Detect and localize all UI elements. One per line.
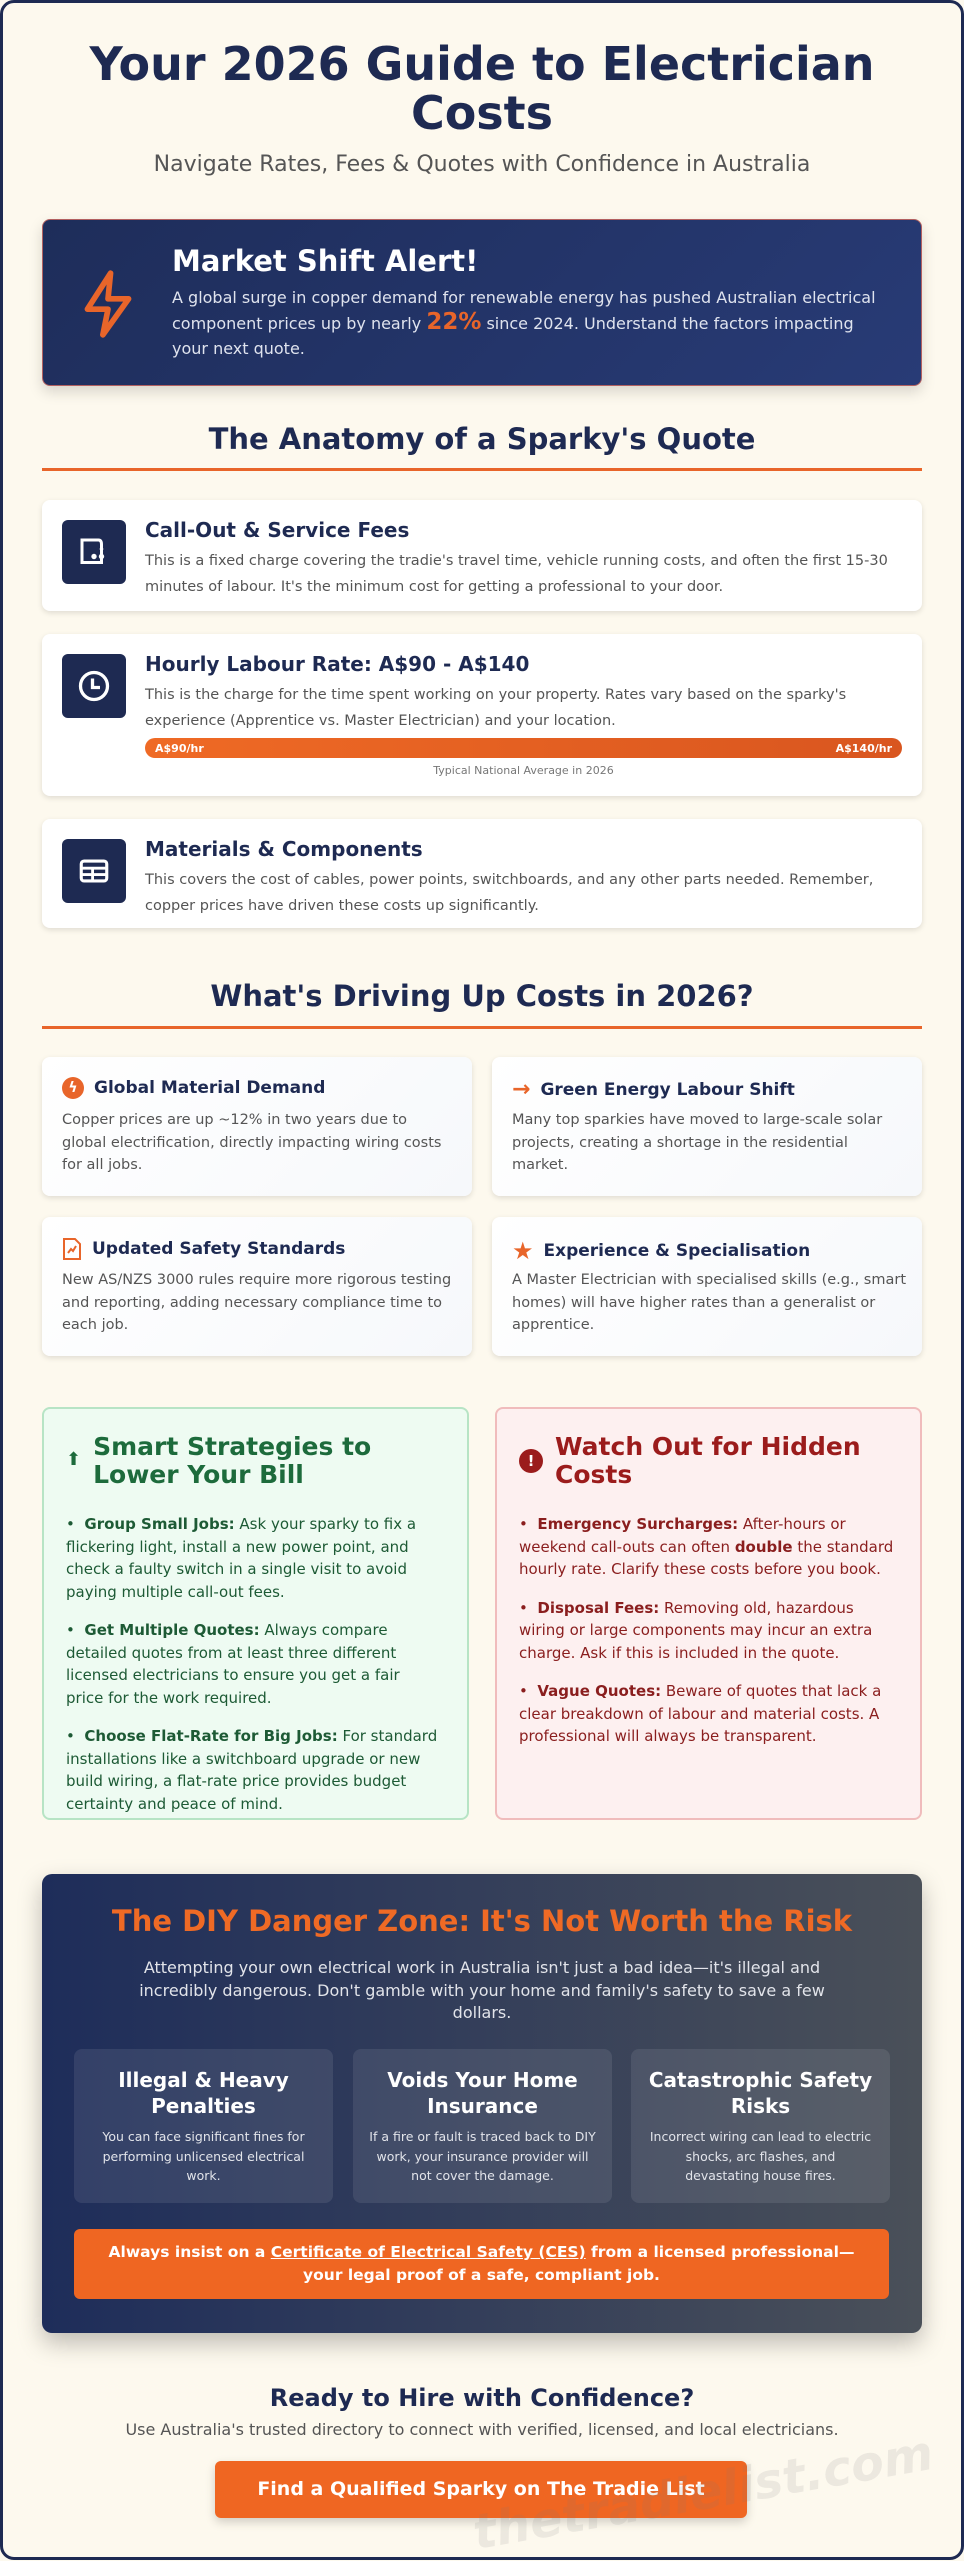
- panel: global material demand: Global Material Demand: [94, 1078, 325, 1098]
- title: Your 2026 Guide to Electrician Costs: [89, 37, 875, 140]
- alert panel: [42, 219, 922, 386]
- CTA button: [215, 2461, 747, 2518]
- callout: CES: Always insist on a Certificate of Electrical Safety (CES) from a licensed professional—your legal proof of a safe, compliant job.: [109, 2243, 854, 2284]
- panel: smart strategies: Smart Strategies to Lower Your Bill: [93, 1432, 371, 1489]
- panel: experience: [492, 1217, 922, 1356]
- sub-card: illegal: [74, 2049, 333, 2203]
- card: call-out fees: This is a fixed charge covering the tradie's travel time, vehicle running costs, and often the first 15-30 minutes of labour. It's the minimum cost for getting a professional to your door.: [145, 553, 888, 595]
- card: hourly labour: Hourly Labour Rate: A$90 - A$140: [145, 652, 529, 676]
- panel: green energy shift: Many top sparkies have moved to large-scale solar projects, creating a shortage in the residential market.: [512, 1112, 882, 1173]
- panel: hidden costs: Watch Out for Hidden Costs: [555, 1432, 861, 1489]
- callout: CES: [74, 2229, 889, 2299]
- panel: hidden costs: • Vague Quotes: Beware of quotes that lack a clear breakdown of labour and material costs. A professional will always be transparent.: [519, 1682, 881, 1745]
- card: call-out fees: Call-Out & Service Fees: [145, 518, 409, 542]
- panel: smart strategies: • Group Small Jobs: Ask your sparky to fix a flickering light, install a new power point, and check a faulty switch in a single visit to avoid paying multiple call-out fees.: [66, 1515, 416, 1600]
- panel: DIY danger zone: [42, 1874, 922, 2333]
- DIY text: Attempting your own electrical work in Australia isn't just a bad idea—it's illegal and incredibly dangerous. Don't gamble with your home and family's safety to save a few dollars.: [139, 1958, 825, 2022]
- panel: global material demand: [42, 1057, 472, 1196]
- panel: smart strategies: ⬆: [66, 1449, 81, 1470]
- panel: experience: ★: [512, 1237, 534, 1265]
- alert heading: Market Shift Alert!: [172, 244, 478, 278]
- card: materials: [42, 819, 922, 928]
- watermark: thetradielist.com: [469, 2425, 937, 2561]
- card: hourly labour: [42, 634, 922, 796]
- icon: table: [62, 839, 126, 903]
- panel: green energy shift: →: [512, 1077, 530, 1102]
- panel: green energy shift: [492, 1057, 922, 1196]
- icon: wallet: [62, 520, 126, 584]
- footer text: Use Australia's trusted directory to connect with verified, licensed, and local electricians.: [125, 2420, 839, 2439]
- panel: experience: A Master Electrician with specialised skills (e.g., smart homes) will have higher rates than a generalist or apprentice.: [512, 1272, 906, 1333]
- panel: hidden costs: !: [528, 1452, 534, 1470]
- DIY heading: The DIY Danger Zone: It's Not Worth the Risk: [112, 1904, 852, 1938]
- CTA button: Find a Qualified Sparky on The Tradie List: [257, 2478, 705, 2500]
- card: call-out fees: [42, 500, 922, 611]
- icon: clock: [62, 654, 126, 718]
- sub-card: insurance: If a fire or fault is traced back to DIY work, your insurance provider will not cover the damage.: [369, 2129, 596, 2183]
- section heading: anatomy: The Anatomy of a Sparky's Quote: [209, 422, 755, 456]
- panel: global material demand: Copper prices are up ~12% in two years due to global electrification, directly impacting wiring costs for all jobs.: [62, 1112, 441, 1173]
- sub-card: safety: Incorrect wiring can lead to electric shocks, arc flashes, and devastating house fires.: [650, 2129, 871, 2183]
- sub-card: insurance: [353, 2049, 612, 2203]
- panel: smart strategies: • Get Multiple Quotes: Always compare detailed quotes from at least three different licensed electricians to ensure you get a fair price for the work required.: [66, 1621, 400, 1706]
- rate bar: [145, 738, 902, 758]
- panel: safety standards: Updated Safety Standards: [92, 1239, 345, 1259]
- sub-card: safety: Catastrophic Safety Risks: [649, 2068, 872, 2118]
- footer heading: Ready to Hire with Confidence?: [270, 2384, 694, 2412]
- rate bar: A$140/hr: [836, 742, 892, 754]
- card: hourly labour: This is the charge for the time spent working on your property. Rates vary based on the sparky's experience (Apprentice vs. Master Electrician) and your location.: [145, 687, 846, 729]
- rate bar: A$90/hr: [155, 742, 204, 754]
- panel: global material demand: ϟ: [68, 1080, 78, 1096]
- panel: hidden costs: • Disposal Fees: Removing old, hazardous wiring or large components may incur an extra charge. Ask if this is included in the quote.: [519, 1598, 872, 1662]
- panel: green energy shift: Green Energy Labour Shift: [540, 1080, 795, 1100]
- panel: smart strategies: • Choose Flat-Rate for Big Jobs: For standard installations like a switchboard upgrade or new build wiring, a flat-rate price provides budget certainty and peace of mind.: [66, 1727, 437, 1812]
- panel: hidden costs: [495, 1407, 922, 1820]
- card: materials: Materials & Components: [145, 837, 423, 861]
- sub-card: illegal: Illegal & Heavy Penalties: [118, 2068, 289, 2118]
- sub-card: illegal: You can face significant fines for performing unlicensed electrical work.: [102, 2129, 305, 2183]
- panel: safety standards: [42, 1217, 472, 1356]
- subtitle: Navigate Rates, Fees & Quotes with Confidence in Australia: [154, 152, 810, 177]
- card: hourly labour: Typical National Average in 2026: [433, 764, 614, 777]
- panel: hidden costs: • Emergency Surcharges: After-hours or weekend call-outs can often double the standard hourly rate. Clarify these costs before you book.: [519, 1515, 893, 1578]
- card: materials: This covers the cost of cables, power points, switchboards, and any other parts needed. Remember, copper prices have driven these costs up significantly.: [145, 872, 873, 914]
- alert text: A global surge in copper demand for renewable energy has pushed Australian electrical component prices up by nearly 22% since 2024. Understand the factors impacting your next quote.: [172, 288, 876, 358]
- sub-card: insurance: Voids Your Home Insurance: [387, 2068, 578, 2118]
- panel: safety standards: New AS/NZS 3000 rules require more rigorous testing and reporting, adding necessary compliance time to each job.: [62, 1272, 451, 1333]
- panel: experience: Experience & Specialisation: [544, 1241, 810, 1261]
- panel: smart strategies: [42, 1407, 469, 1820]
- section heading: drivers: What's Driving Up Costs in 2026?: [210, 979, 754, 1013]
- sub-card: safety: [631, 2049, 890, 2203]
- icon: lightning: [84, 270, 132, 338]
